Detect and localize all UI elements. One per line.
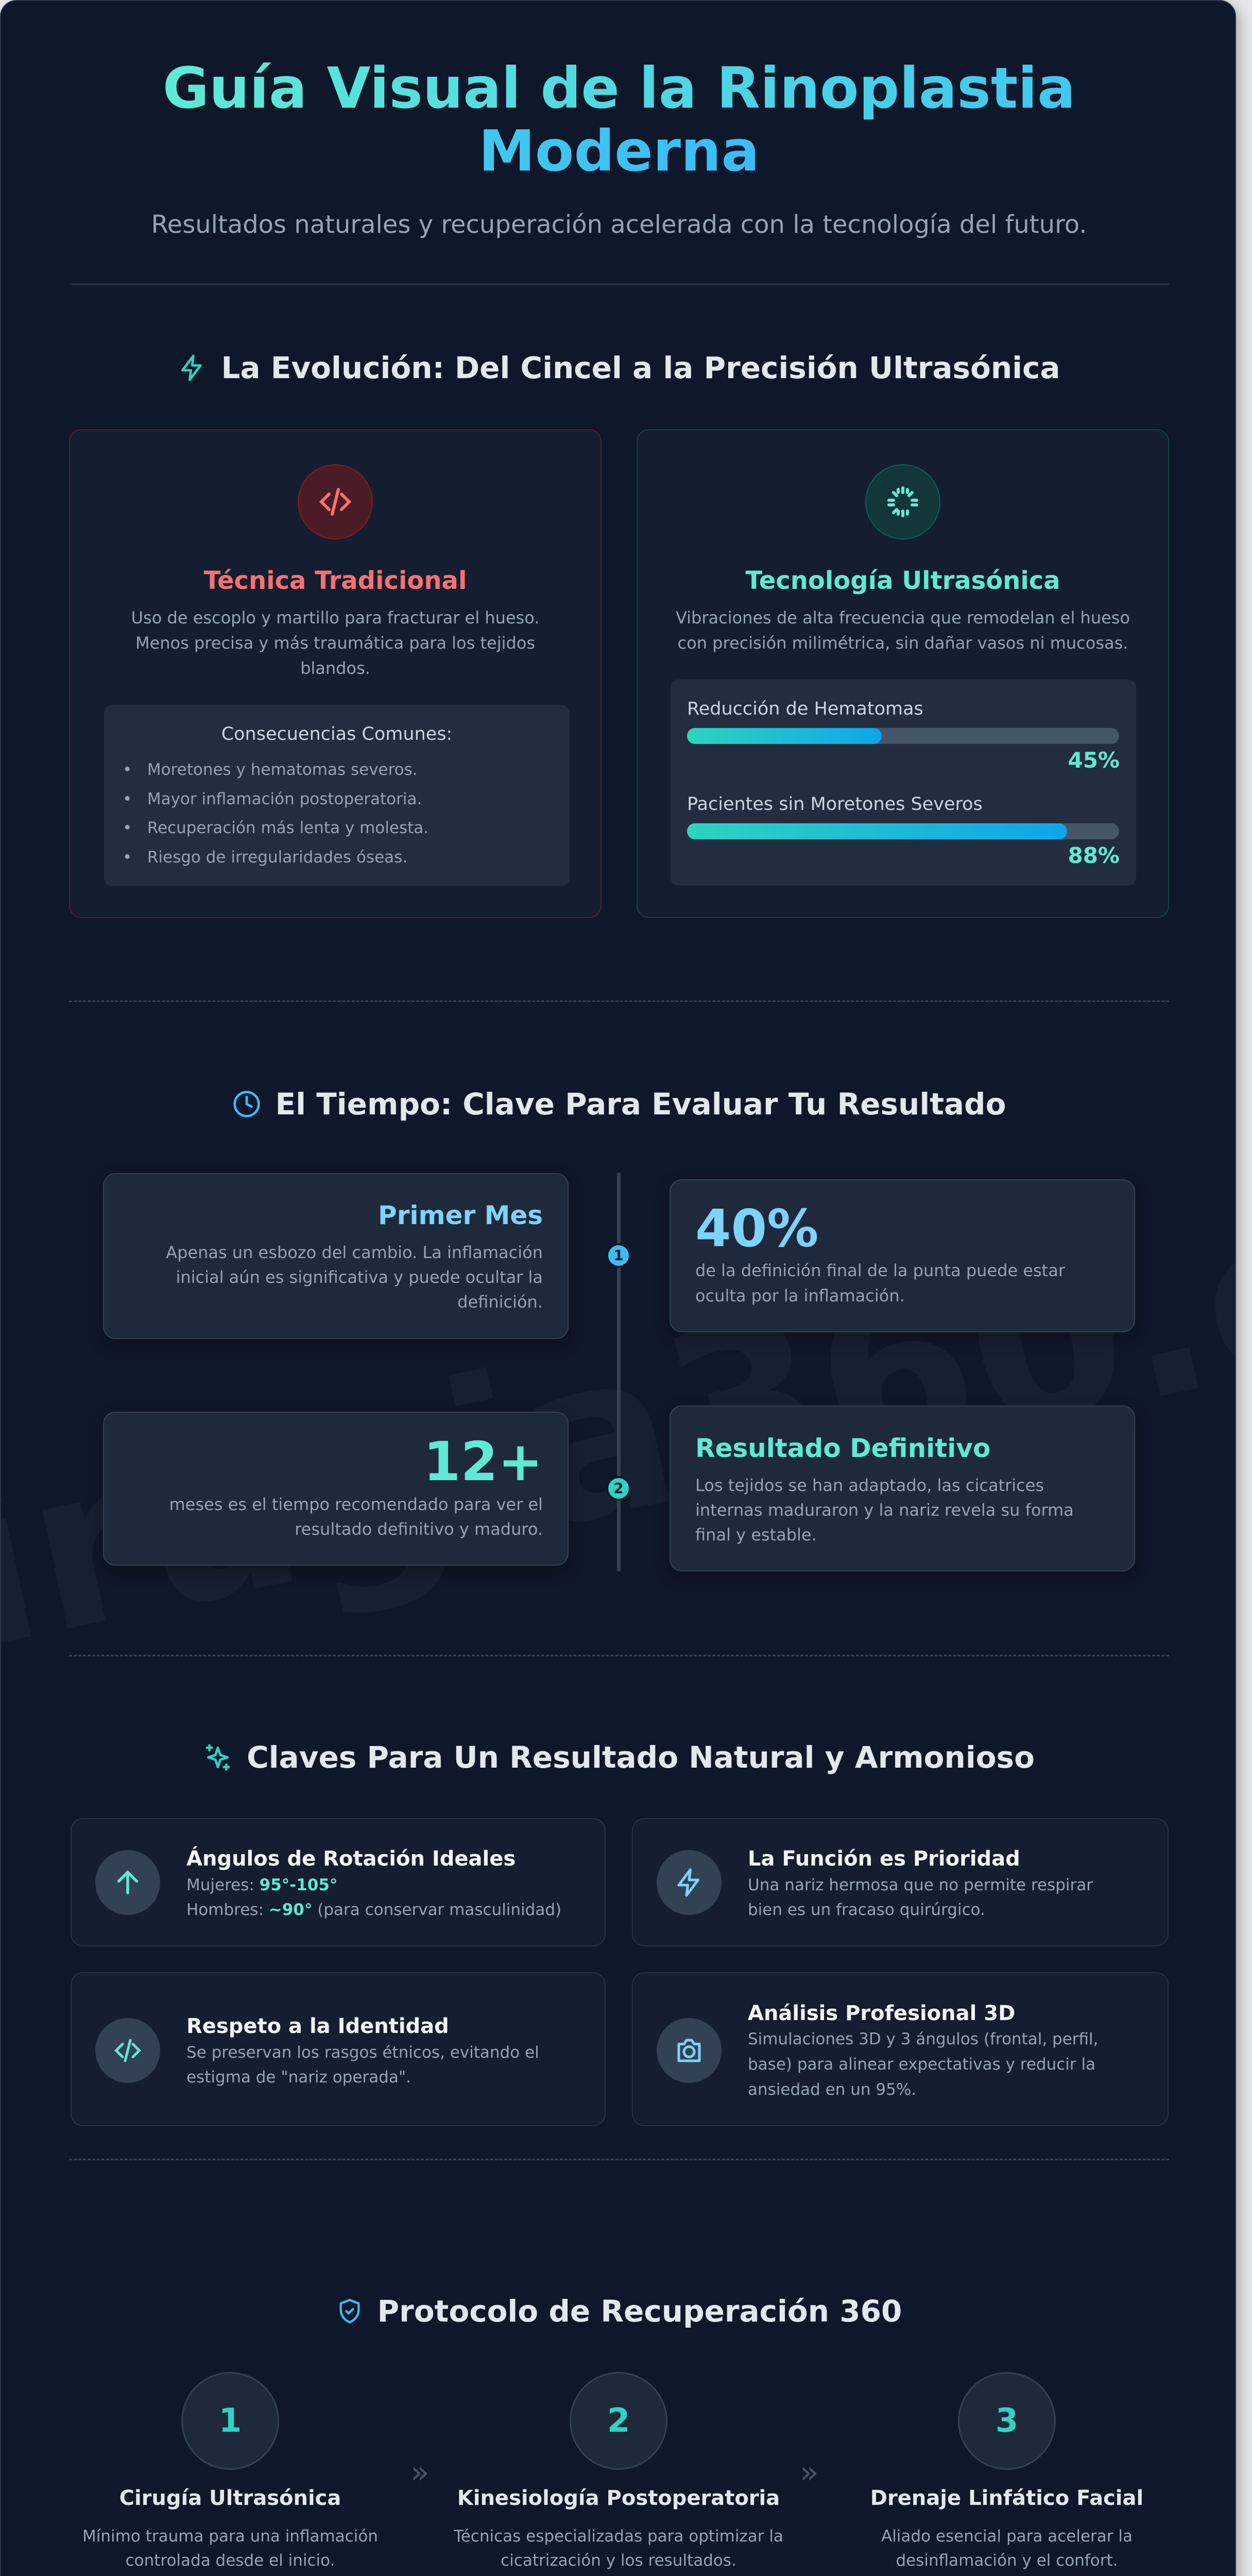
step 2: Kinesiología Postoperatoria <box>457 2486 780 2510</box>
card: identidad: Respeto a la Identidad <box>186 2014 449 2038</box>
step 3: Aliado esencial para acelerar la desinflamación y el confort. <box>881 2527 1133 2570</box>
step 3: Drenaje Linfático Facial <box>870 2486 1143 2510</box>
card: resultado definitivo <box>670 1405 1135 1571</box>
card: función <box>632 1818 1169 1946</box>
card: 40% <box>670 1179 1135 1332</box>
card: ángulos: Mujeres: 95°-105° <box>186 1876 337 1894</box>
step 1: Mínimo trauma para una inflamación controlada desde el inicio. <box>82 2527 378 2570</box>
arrow 2: » <box>800 2454 819 2490</box>
card: 40%: de la definición final de la punta puede estar oculta por la inflamación. <box>695 1261 1065 1306</box>
timeline line <box>617 1173 621 1571</box>
bar: moretones: 88% <box>1068 843 1120 868</box>
heading: evolución: La Evolución: Del Cincel a la Precisión Ultrasónica <box>221 350 1060 385</box>
node 2: 2 <box>613 1480 624 1497</box>
bar: hematomas: 45% <box>1068 748 1120 773</box>
card: primer mes: Primer Mes <box>378 1200 543 1230</box>
heading: Técnica Tradicional <box>204 566 467 595</box>
card: ángulos <box>71 1818 606 1946</box>
card: 12+ <box>103 1412 569 1566</box>
list box: Consecuencias Comunes: <box>221 724 452 744</box>
bar: hematomas: Reducción de Hematomas <box>687 699 923 719</box>
step 1: 1 <box>219 2402 242 2440</box>
list box: • Moretones y hematomas severos. <box>123 760 418 779</box>
card: primer mes <box>103 1173 569 1339</box>
card: 40%: 40% <box>695 1198 818 1259</box>
title: Moderna <box>478 118 760 184</box>
stats box <box>671 680 1136 886</box>
node 1: 1 <box>613 1247 624 1264</box>
heading: tiempo: El Tiempo: Clave Para Evaluar Tu Resultado <box>276 1087 1006 1122</box>
arrow 1: » <box>410 2454 430 2490</box>
node 1 <box>606 1243 631 1268</box>
card: función: La Función es Prioridad <box>748 1847 1020 1871</box>
step 1 <box>82 2372 378 2570</box>
panel: tecnología ultrasónica <box>637 429 1169 918</box>
card: identidad <box>71 1972 606 2126</box>
node 2 <box>606 1476 631 1501</box>
title: Guía Visual de la Rinoplastia <box>163 55 1075 121</box>
card: análisis 3D: Análisis Profesional 3D <box>748 2002 1015 2025</box>
card: análisis 3D <box>632 1972 1169 2126</box>
heading: Tecnología Ultrasónica <box>745 566 1060 595</box>
bar: moretones: Pacientes sin Moretones Severos <box>687 794 983 815</box>
step 3: 3 <box>996 2402 1018 2440</box>
card: resultado definitivo: Resultado Definitivo <box>695 1433 990 1463</box>
card: identidad: Se preservan los rasgos étnicos, evitando el estigma de "nariz operada". <box>186 2043 539 2087</box>
list box: • Riesgo de irregularidades óseas. <box>123 848 407 867</box>
description: Uso de escoplo y martillo para fracturar el hueso. Menos precisa y más traumática para los tejidos blandos. <box>131 608 539 678</box>
step 1: Cirugía Ultrasónica <box>119 2486 341 2510</box>
list box: • Mayor inflamación postoperatoria. <box>123 789 422 808</box>
heading: protocolo: Protocolo de Recuperación 360 <box>378 2294 902 2329</box>
step 2 <box>454 2372 783 2570</box>
step 2: 2 <box>607 2402 630 2440</box>
card: análisis 3D: Simulaciones 3D y 3 ángulos (frontal, perfil, base) para alinear expectativas y reducir la ansiedad en un 95%. <box>748 2030 1099 2099</box>
panel: técnica tradicional <box>69 429 602 918</box>
step 2: Técnicas especializadas para optimizar la cicatrización y los resultados. <box>454 2527 783 2570</box>
card: resultado definitivo: Los tejidos se han adaptado, las cicatrices internas maduraron y la nariz revela su forma final y estable. <box>695 1476 1074 1545</box>
bar: hematomas <box>687 699 1120 773</box>
list box: • Recuperación más lenta y molesta. <box>123 819 428 837</box>
card: 12+: 12+ <box>423 1430 543 1493</box>
card: función: Una nariz hermosa que no permite respirar bien es un fracaso quirúrgico. <box>748 1876 1093 1919</box>
icon: ultrasonic <box>865 464 940 539</box>
description: Vibraciones de alta frecuencia que remodelan el hueso con precisión milimétrica, sin dañar vasos ni mucosas. <box>676 608 1130 653</box>
card: ángulos: Hombres: ~90° (para conservar masculinidad) <box>186 1901 561 1919</box>
title <box>163 55 1075 184</box>
list box <box>104 705 570 886</box>
card: primer mes: Apenas un esbozo del cambio. La inflamación inicial aún es significativa y puede ocultar la definición. <box>166 1243 543 1312</box>
card: 12+: meses es el tiempo recomendado para ver el resultado definitivo y maduro. <box>169 1495 543 1539</box>
icon: code red <box>298 464 373 539</box>
subtitle: Resultados naturales y recuperación acelerada con la tecnología del futuro. <box>151 210 1087 239</box>
heading: claves: Claves Para Un Resultado Natural y Armonioso <box>247 1740 1035 1775</box>
step 3 <box>870 2372 1143 2570</box>
bar: moretones <box>687 794 1120 868</box>
card: ángulos: Ángulos de Rotación Ideales <box>186 1847 516 1871</box>
